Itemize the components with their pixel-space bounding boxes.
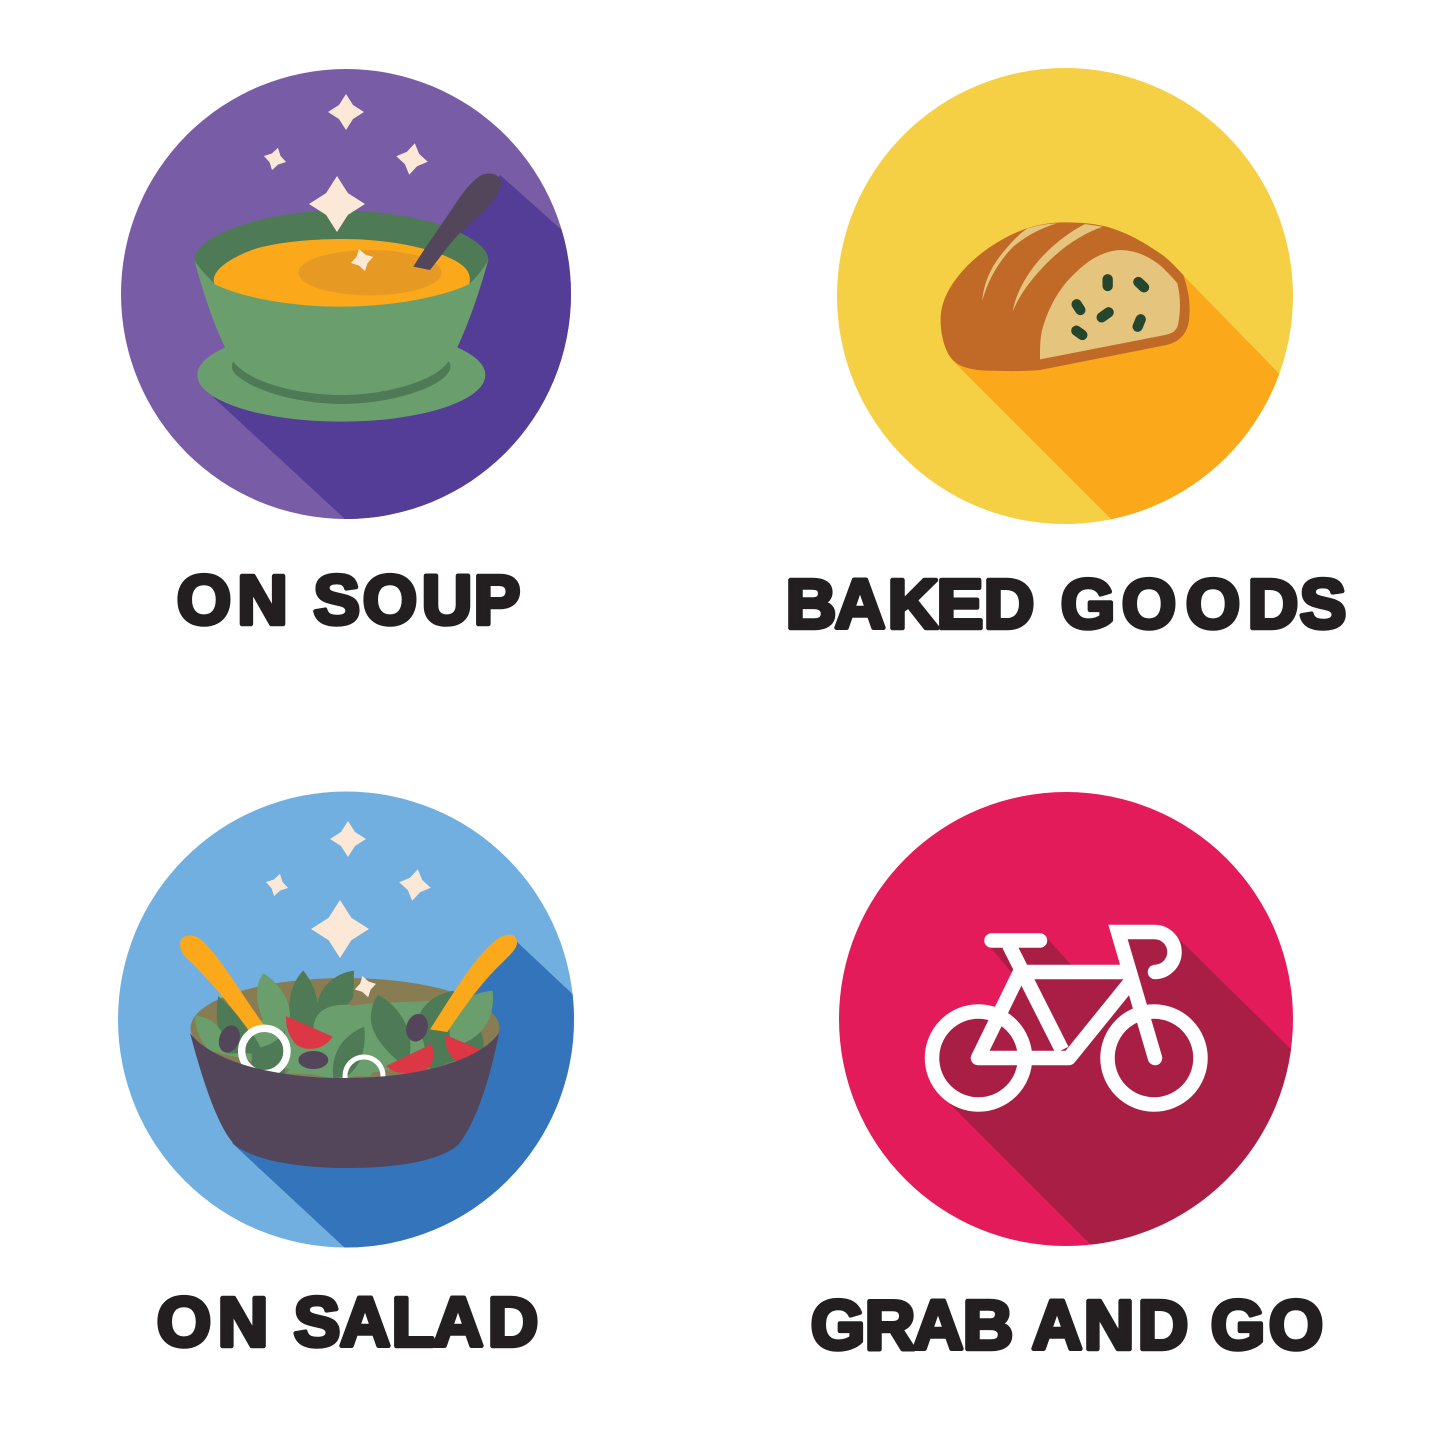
panel: grab and go	[839, 792, 1310, 1246]
icon: sparkles	[261, 94, 431, 274]
icon: bread loaf	[941, 222, 1190, 371]
heading: on salad: ON SALAD	[157, 1283, 538, 1361]
grab and go circle background	[839, 792, 1293, 1246]
heading: baked goods: BAKED GOODS	[786, 565, 1346, 643]
grab and go long shadow	[939, 938, 1291, 1245]
icon: soup bowl	[194, 173, 501, 422]
heading: on soup: ON SOUP	[177, 561, 520, 639]
salad circle background	[118, 792, 574, 1248]
panel: baked goods	[837, 68, 1300, 524]
panel: on salad	[118, 792, 600, 1248]
baked goods long shadow	[955, 275, 1300, 520]
icon: salad bowl	[180, 935, 517, 1168]
icon: sparkles	[263, 821, 434, 958]
baked goods circle background	[837, 68, 1293, 524]
panel: on soup	[121, 69, 600, 525]
soup long shadow	[213, 175, 600, 525]
icon: bicycle	[932, 932, 1200, 1104]
heading: grab and go: GRAB AND GO	[811, 1286, 1323, 1364]
soup circle background	[121, 69, 571, 519]
salad long shadow	[232, 940, 600, 1248]
